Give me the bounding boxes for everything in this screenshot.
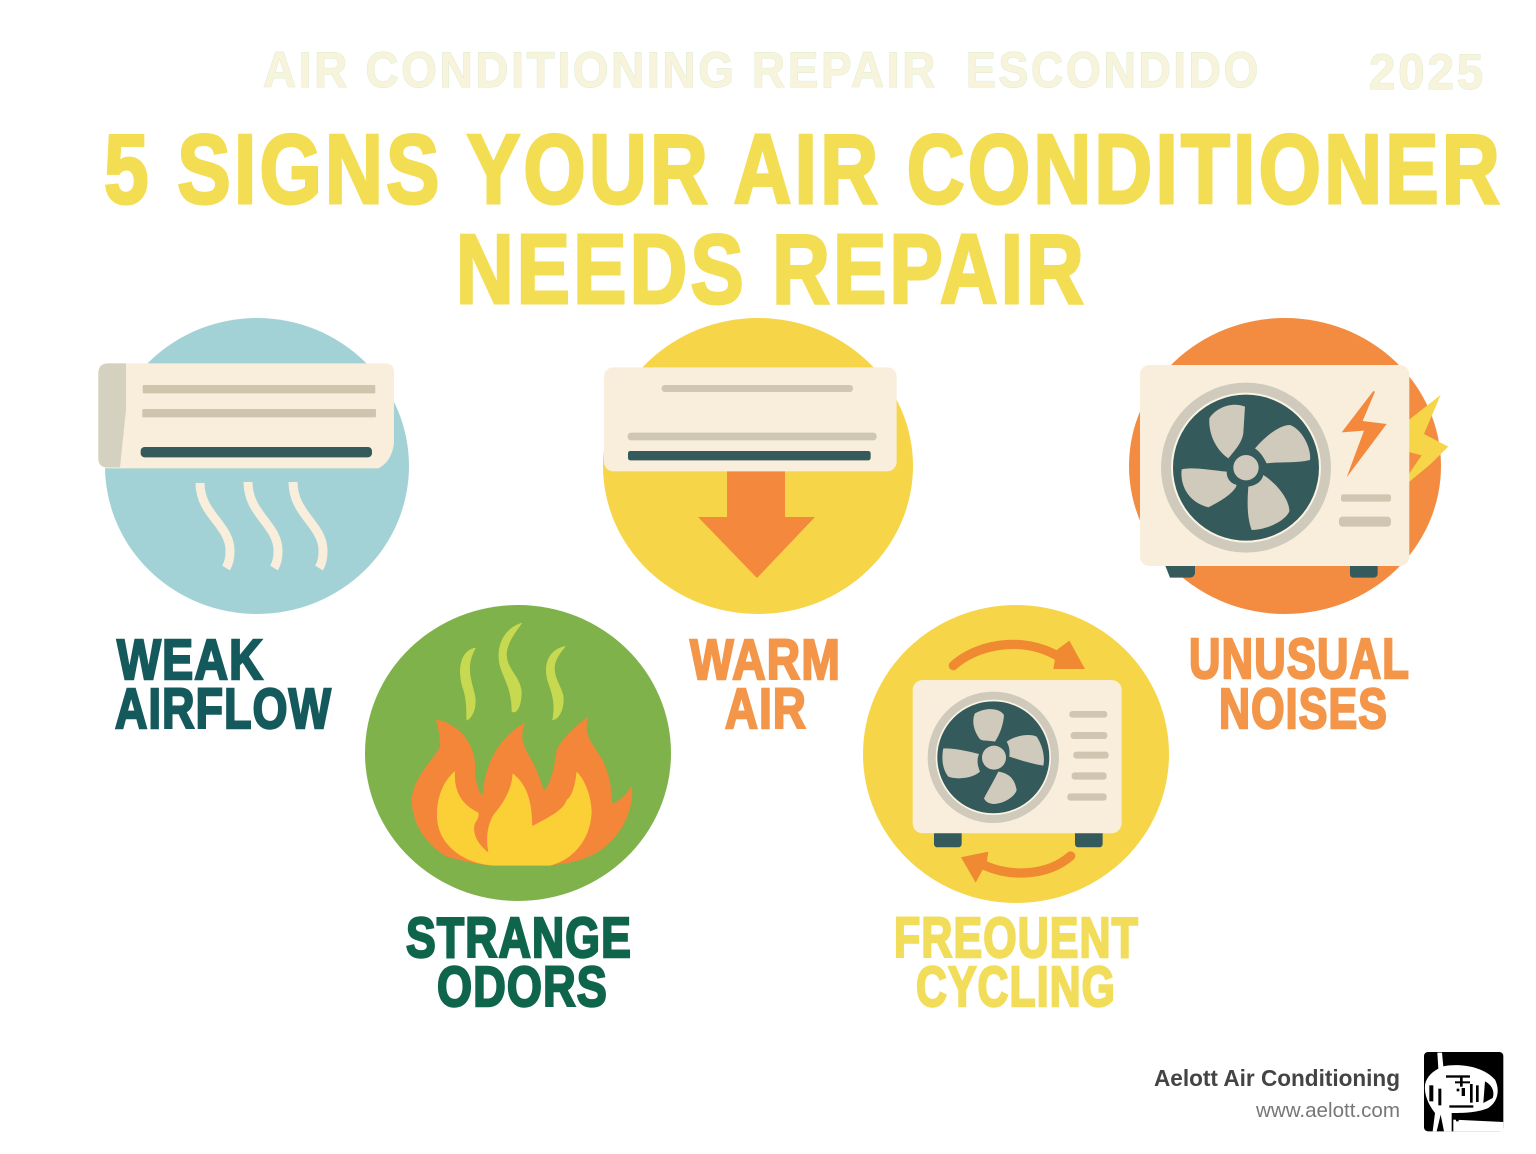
panel: warm air icon <box>603 318 913 614</box>
yellow spark <box>1407 395 1448 484</box>
label: weak airflow: WEAK <box>117 628 264 692</box>
pale heading line: Air Conditioning Repair Escondido: ESCONDIDO <box>966 42 1261 98</box>
footer brand name: Aelott Air Conditioning <box>1154 1065 1400 1091</box>
down arrow <box>698 471 815 578</box>
orange flame <box>412 717 632 866</box>
label: weak airflow: AIRFLOW <box>115 677 332 741</box>
label: warm air: AIR <box>725 677 807 741</box>
label: strange odors: ODORS <box>437 955 608 1019</box>
outdoor unit body <box>1140 365 1409 566</box>
label: frequent cycling: FREOUENT <box>894 906 1139 970</box>
cycling arrows <box>953 641 1085 883</box>
panel: unusual noises icon <box>1129 318 1448 614</box>
footer website: www.aelott.com <box>1255 1100 1400 1122</box>
orange bolt <box>1342 391 1387 477</box>
label: unusual noises <box>1189 627 1410 741</box>
logo <box>1424 1052 1503 1131</box>
feet <box>1165 565 1195 578</box>
pale heading line: Air Conditioning Repair Escondido: AIR CONDITIONING REPAIR <box>263 42 938 98</box>
label: strange odors <box>406 906 632 1019</box>
indoor AC unit <box>98 363 394 468</box>
label: weak airflow <box>115 628 332 741</box>
vents <box>1341 494 1391 502</box>
air waves <box>200 482 323 568</box>
label: strange odors: STRANGE <box>406 906 632 970</box>
label: frequent cycling: CYCLING <box>916 955 1116 1019</box>
label: frequent cycling <box>894 906 1139 1019</box>
label: unusual noises: UNUSUAL <box>1189 627 1410 691</box>
panel: frequent cycling icon <box>863 605 1169 903</box>
smoke wisps <box>460 623 566 721</box>
panel: weak airflow icon <box>98 318 409 614</box>
feet <box>934 830 962 847</box>
title <box>104 114 1503 324</box>
panel: strange odors icon <box>365 605 671 901</box>
label: warm air <box>690 628 841 741</box>
fan <box>928 692 1059 823</box>
yellow flame <box>437 771 592 866</box>
label: warm air: WARM <box>690 628 841 692</box>
outdoor unit body <box>913 680 1122 833</box>
label: unusual noises: NOISES <box>1219 677 1388 741</box>
title: NEEDS REPAIR <box>456 214 1087 324</box>
fan <box>1161 383 1331 553</box>
pale year label: 2025 <box>1369 44 1486 100</box>
indoor AC unit <box>604 367 897 471</box>
vents <box>1067 711 1109 801</box>
